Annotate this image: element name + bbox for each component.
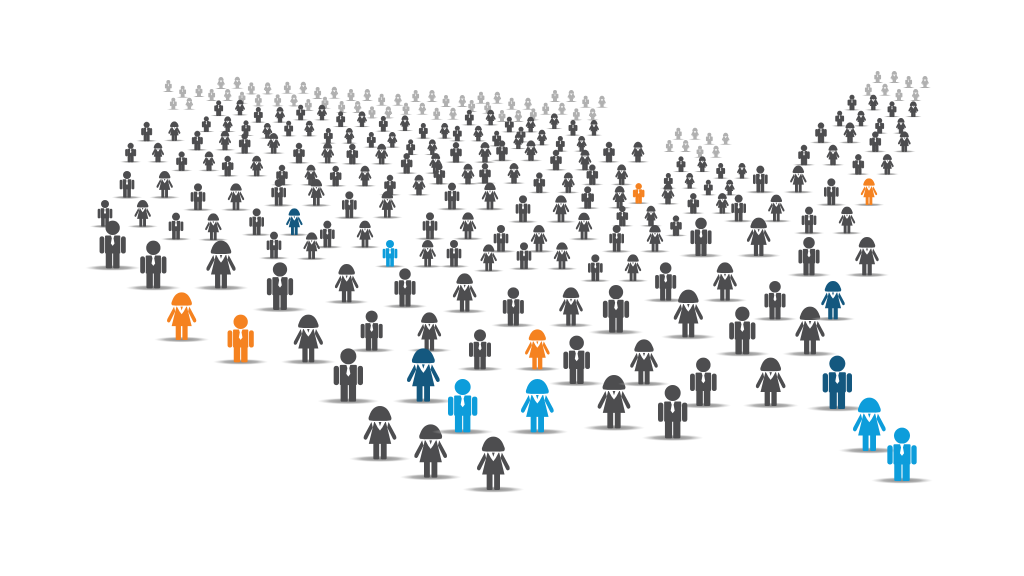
icon: light blue woman, Florida [838, 398, 900, 454]
crowd: north-west states (Washington, Montana, Dakotas) [90, 77, 380, 228]
icon: light blue woman, Gulf coast [506, 379, 568, 435]
crowd: Texas and the south [317, 329, 645, 493]
dark rows of people, south-east [618, 339, 799, 441]
icon: light blue man, Gulf coast [432, 379, 494, 435]
icon: orange man, Arizona [213, 315, 268, 365]
dark rows of people, east [661, 207, 889, 357]
dark rows of people, north-west [90, 100, 380, 228]
dark rows of people, west [85, 208, 395, 365]
crowd: west coast and south-west [85, 208, 395, 365]
icon: orange man, Great Lakes [627, 183, 650, 204]
crowd: north-central states (Minnesota, Wisconsin) [370, 90, 663, 227]
icon: light blue man, Florida [871, 428, 933, 484]
faded back rows of people, north-east [663, 71, 932, 158]
icon: dark blue woman, west [279, 208, 310, 236]
crowd: central plains [375, 212, 688, 353]
faded back row of people, north-central [375, 90, 609, 122]
crowd: mid-Atlantic and south-east [661, 207, 889, 357]
faded back row of people, north-west [162, 77, 379, 119]
icon: dark blue woman, Texas [392, 348, 454, 404]
dark rows of people, north-central [370, 110, 663, 227]
icon: dark blue man, Carolinas [806, 356, 868, 412]
dark rows of people, north-east [656, 95, 922, 223]
icon: orange woman, southern California [154, 292, 209, 342]
icon: light blue man, central [375, 240, 405, 268]
crowd: south-east and Florida [618, 339, 933, 484]
dark rows of people, south [317, 329, 645, 493]
dark rows of people, central [383, 212, 688, 353]
icon: orange woman, New England [854, 178, 884, 206]
icon: dark blue woman, Virginia coast [811, 281, 855, 321]
crowd: Great Lakes and New England [656, 71, 932, 223]
icon: orange woman, south [514, 329, 561, 371]
